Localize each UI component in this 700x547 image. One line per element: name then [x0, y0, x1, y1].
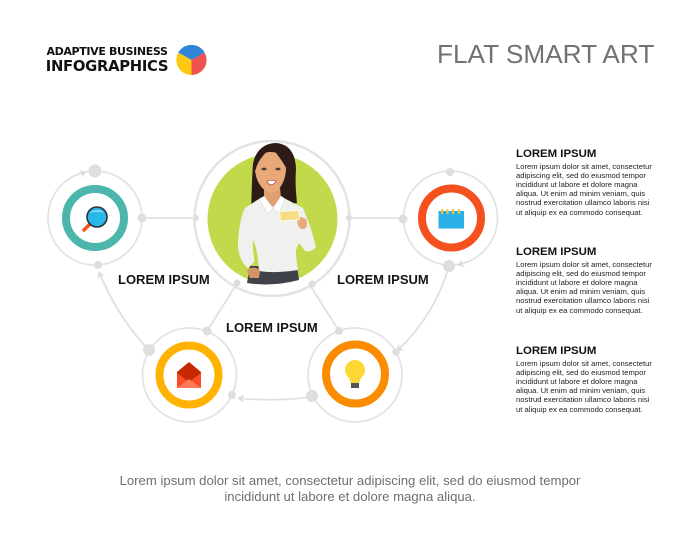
neck [264, 188, 281, 207]
label: left: LOREM IPSUM [118, 272, 210, 287]
text block 1: aliqua. Ut enim ad minim veniam, quis [516, 189, 645, 198]
label: right: LOREM IPSUM [337, 272, 429, 287]
text block 2: nostrud exercitation ullamco laboris nisi [516, 296, 649, 305]
text block 3: nostrud exercitation ullamco laboris nisi [516, 395, 649, 404]
text block 1: incididunt ut labore et dolore magna [516, 180, 637, 189]
woman illustration [238, 143, 316, 284]
face [255, 152, 286, 193]
text block 1: Lorem ipsum dolor sit amet, consectetur [516, 162, 652, 170]
amber ring [160, 346, 218, 404]
icon: logo pie [176, 44, 207, 75]
text block 3: Lorem ipsum dolor sit amet, consectetur [516, 358, 652, 368]
text block 3: aliqua. Ut enim ad minim veniam, quis [516, 386, 645, 395]
text block 3 [516, 345, 652, 414]
icon: light bulb [345, 360, 365, 388]
icon: magnifier [84, 207, 107, 230]
orange ring [326, 344, 385, 404]
text block 2: incididunt ut labore et dolore magna [516, 278, 637, 287]
eyes [261, 168, 267, 170]
node: bottom right [306, 327, 402, 422]
text block 2 [516, 246, 652, 315]
shirt [238, 197, 316, 272]
label: bottom: LOREM IPSUM [226, 320, 318, 335]
badge card [280, 210, 299, 221]
main title: FLAT SMART ART [437, 39, 654, 69]
text block 3: ut aliquip ex ea commodo consequat. [516, 405, 643, 414]
logo title: INFOGRAPHICS [46, 58, 168, 75]
fringe [253, 147, 288, 172]
green disc [208, 154, 338, 284]
text block 1 [516, 148, 652, 217]
teal ring [66, 189, 124, 247]
skirt [247, 266, 299, 284]
text block 1: LOREM IPSUM [516, 148, 596, 160]
text block 3: adipiscing elit, sed do eiusmod tempor [516, 368, 646, 377]
node: top right [398, 168, 498, 272]
footer text: incididunt ut labore et dolore magna aliqua. [224, 489, 476, 504]
red ring [422, 188, 481, 248]
icon: calendar [438, 209, 464, 228]
hair back [250, 143, 297, 223]
text block 2: ut aliquip ex ea commodo consequat. [516, 306, 643, 315]
text block 1: ut aliquip ex ea commodo consequat. [516, 208, 643, 217]
icon: envelope [177, 362, 201, 388]
text block 1: nostrud exercitation ullamco laboris nisi [516, 198, 649, 207]
text block 2: Lorem ipsum dolor sit amet, consectetur [516, 260, 652, 268]
text block 3: LOREM IPSUM [516, 345, 596, 357]
text block 1: adipiscing elit, sed do eiusmod tempor [516, 171, 646, 180]
hand [297, 216, 307, 229]
node: bottom left [142, 326, 236, 422]
node: top left [48, 164, 146, 269]
central portrait [193, 141, 352, 296]
text block 3: incididunt ut labore et dolore magna [516, 377, 637, 386]
text block 2: adipiscing elit, sed do eiusmod tempor [516, 269, 646, 278]
mouth [267, 180, 276, 185]
footer text [120, 473, 580, 504]
text block 2: aliqua. Ut enim ad minim veniam, quis [516, 287, 645, 296]
text block 2: LOREM IPSUM [516, 246, 596, 258]
collar [260, 196, 285, 214]
logo title: ADAPTIVE BUSINESS [46, 45, 168, 58]
connectors [99, 218, 449, 400]
hip hand [247, 268, 260, 278]
footer text: Lorem ipsum dolor sit amet, consectetur adipiscing elit, sed do eiusmod tempor [120, 473, 580, 488]
logo title [46, 45, 168, 75]
